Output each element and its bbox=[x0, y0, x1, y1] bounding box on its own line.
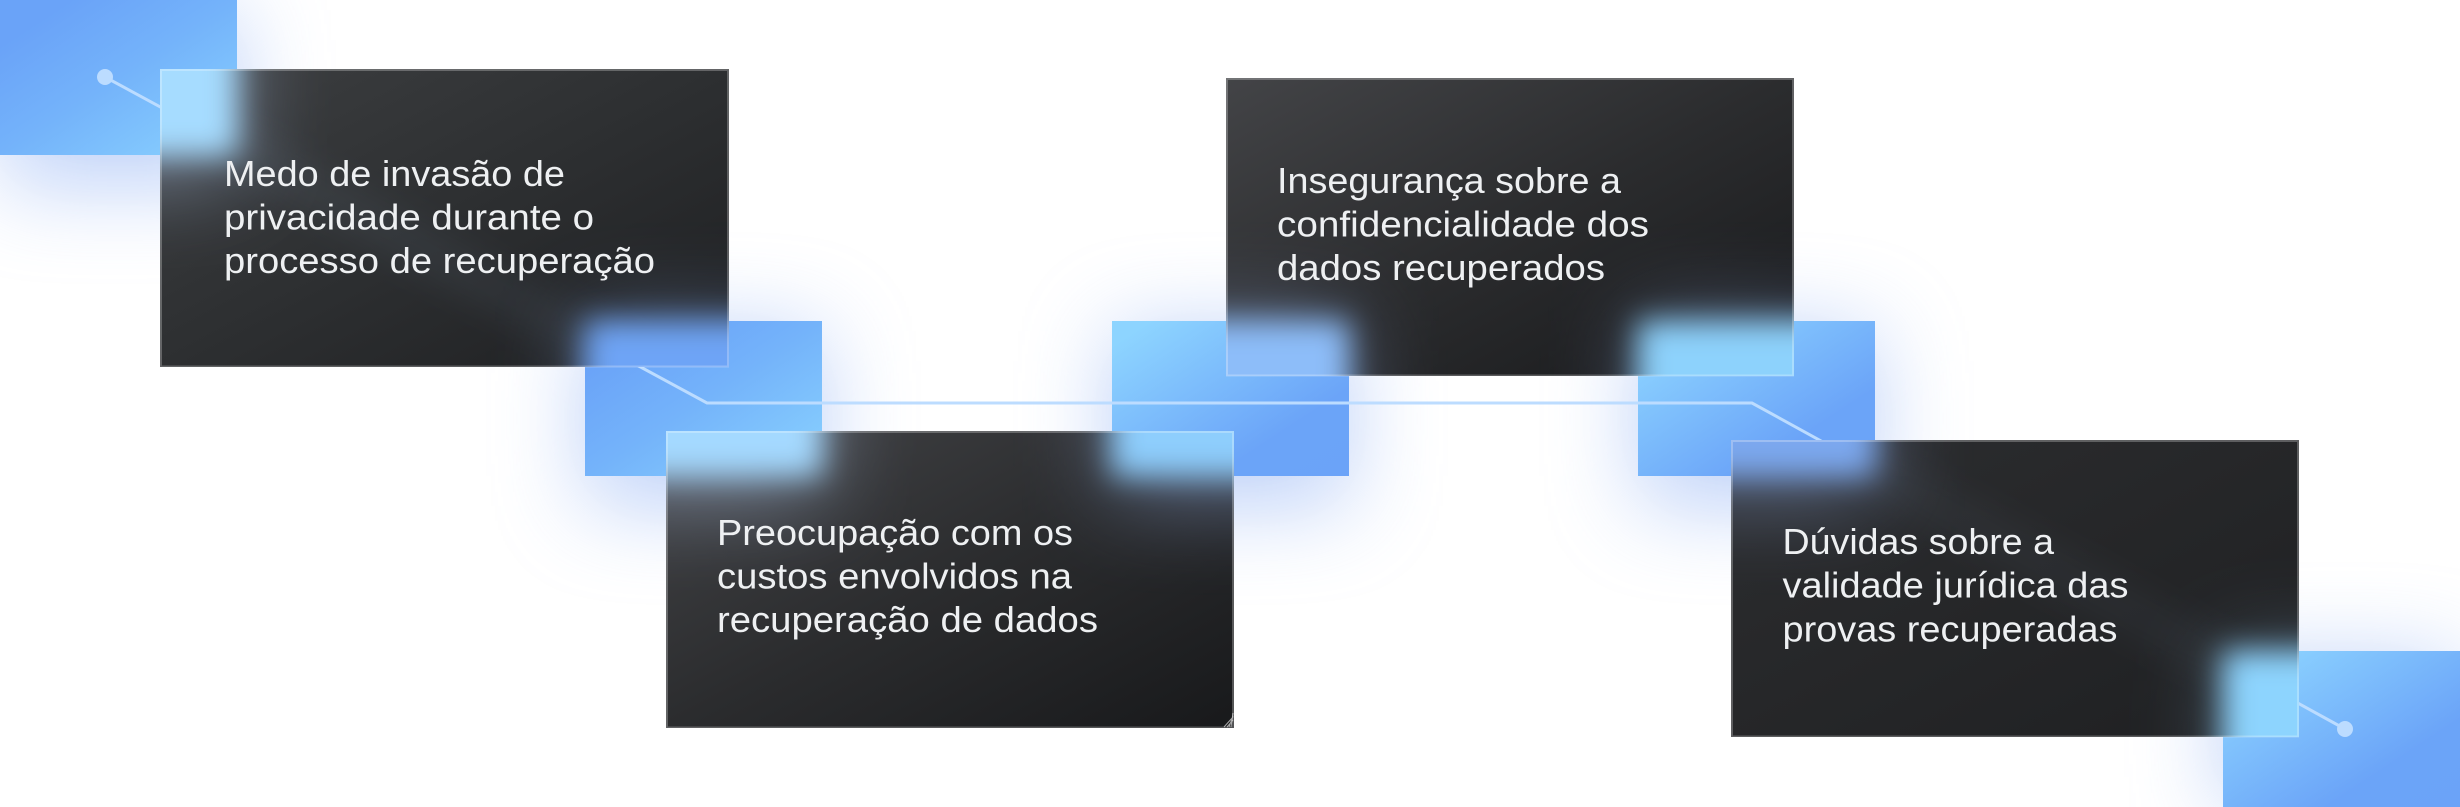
text: card 3: Insegurança sobre a bbox=[1277, 160, 1622, 201]
text: card 4: Dúvidas sobre a bbox=[1782, 521, 2055, 562]
blue square: top left bbox=[0, 0, 237, 155]
text: card 2: recuperação de dados bbox=[717, 599, 1098, 640]
panel: card 1, privacy bbox=[160, 69, 729, 368]
text: card 1 bbox=[224, 153, 655, 281]
connector line with end dots bbox=[97, 69, 2353, 737]
text: card 1: Medo de invasão de bbox=[224, 153, 565, 194]
text: card 2: custos envolvidos na bbox=[717, 556, 1073, 596]
blue square: second bbox=[585, 321, 822, 476]
text: card 4: provas recuperadas bbox=[1782, 608, 2118, 650]
text: card 3: dados recuperados bbox=[1277, 247, 1605, 288]
panel: card 3, confidentiality bbox=[1226, 78, 1794, 376]
text: card 2: Preocupação com os bbox=[717, 512, 1073, 553]
panel: card 2, costs bbox=[666, 431, 1234, 728]
text: card 4: validade jurídica das bbox=[1782, 564, 2128, 606]
text: card 3 bbox=[1277, 160, 1649, 288]
text: card 1: privacidade durante o bbox=[224, 196, 594, 238]
panel: card 4, legal validity bbox=[1731, 440, 2299, 738]
text: card 2 bbox=[717, 512, 1098, 640]
blue square: third bbox=[1112, 321, 1349, 476]
blue square: bottom right bbox=[2223, 651, 2460, 807]
blue square: fourth bbox=[1638, 321, 1875, 476]
text: card 3: confidencialidade dos bbox=[1277, 204, 1649, 244]
text: card 1: processo de recuperação bbox=[224, 240, 655, 281]
text: card 4 bbox=[1782, 521, 2128, 650]
icon: corner speckle bbox=[1224, 713, 1233, 727]
